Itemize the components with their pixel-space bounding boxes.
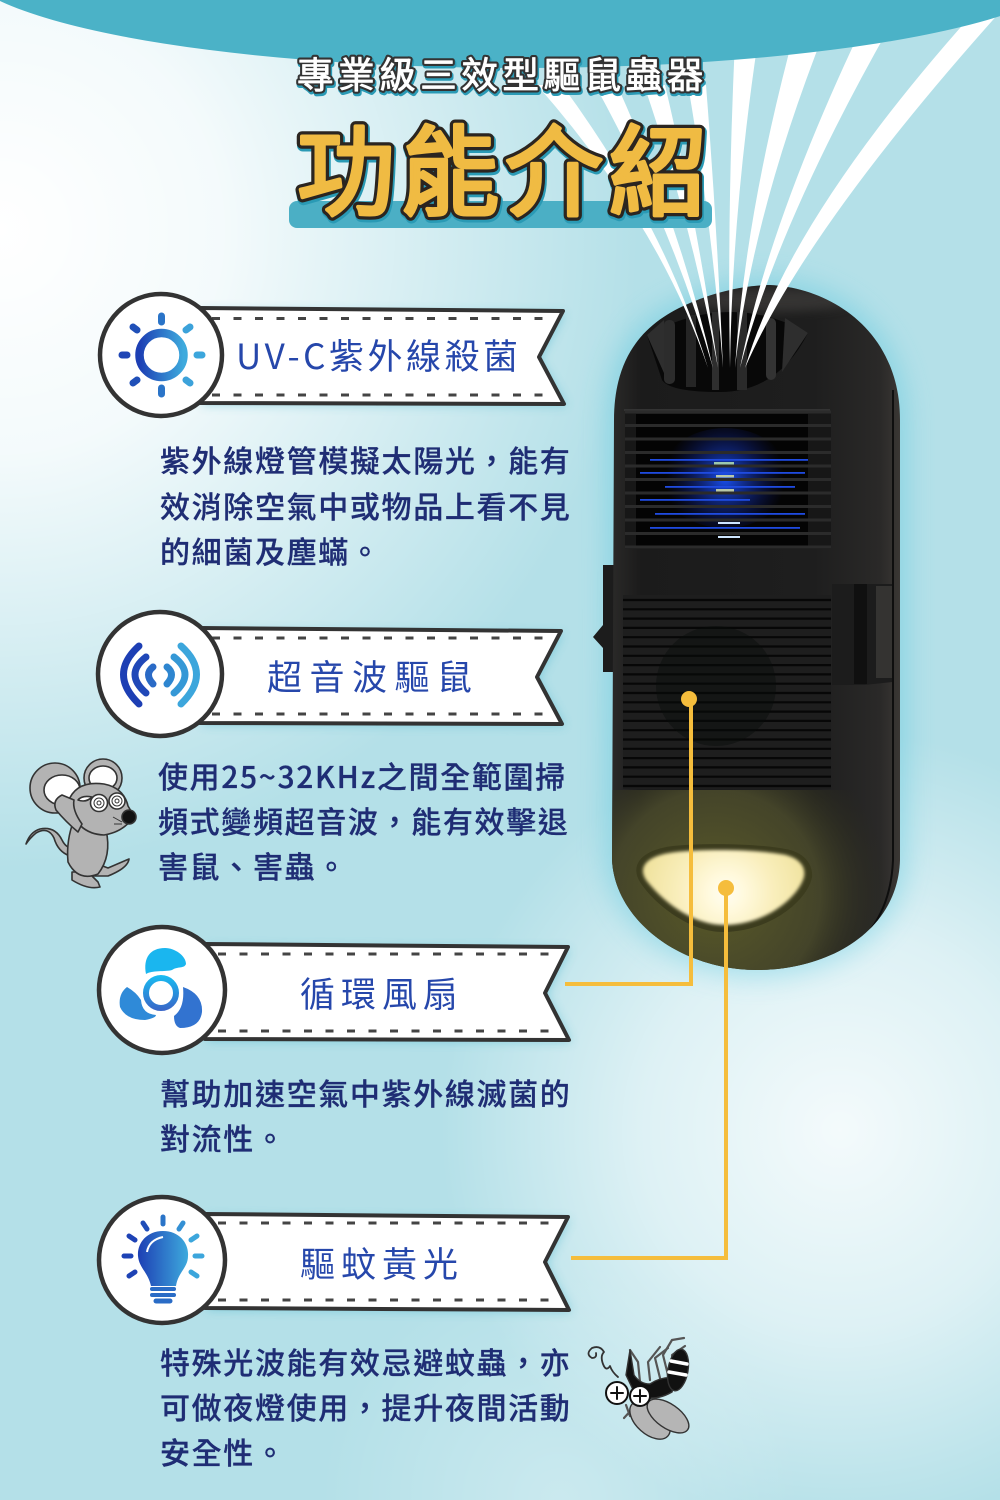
- legs: [624, 1338, 685, 1418]
- subtitle: 專業級三效型驅鼠蟲器: [297, 46, 708, 99]
- title underbar: [289, 201, 712, 228]
- subtitle: 專業級三效型驅鼠蟲器: [297, 46, 708, 99]
- upper grille: [625, 411, 831, 549]
- description: yellow light: 特殊光波能有效忌避蚊蟲，亦: [160, 1339, 571, 1383]
- top highlight: [685, 288, 855, 312]
- feature: yellow light: [99, 1197, 572, 1473]
- description: ultrasonic: 使用25~32KHz之間全範圍掃: [158, 753, 567, 797]
- eyes: [606, 1382, 628, 1404]
- tail: [26, 828, 72, 856]
- air streaks from device vent: [537, 0, 1000, 368]
- lower grille: [623, 595, 831, 789]
- arm: [55, 795, 82, 832]
- device body: [612, 285, 900, 970]
- legs: [72, 872, 100, 888]
- speaker circle: [656, 626, 776, 746]
- connector: fan to device: [565, 691, 697, 984]
- UV blue glow: [669, 428, 781, 527]
- heading: ultrasonic: 超音波驅鼠: [267, 650, 480, 701]
- title: 功能介紹: [297, 94, 713, 236]
- badge: sound wave icon: [98, 612, 222, 736]
- head: [68, 783, 134, 835]
- right seam: [869, 390, 894, 930]
- title: 功能介紹: [298, 96, 714, 238]
- illustration: dizzy mosquito: [588, 1338, 695, 1446]
- feature: UV-C: [100, 294, 571, 572]
- proboscis: [588, 1347, 618, 1377]
- ribbon 4: [205, 1214, 572, 1312]
- ribbon 3: [205, 944, 572, 1042]
- description: ultrasonic: 害鼠、害蟲。: [158, 843, 348, 887]
- ears: [30, 763, 80, 813]
- wings: [623, 1394, 677, 1446]
- top arc banner: [0, 0, 1000, 68]
- illustration: dizzy mouse: [26, 759, 136, 888]
- striped abdomen: [665, 1348, 691, 1392]
- vent lower band line: [624, 409, 830, 411]
- olive lamp tint: [612, 790, 868, 970]
- title: 功能介紹: [297, 94, 713, 236]
- torso: [68, 815, 108, 876]
- badge: fan icon: [99, 927, 225, 1053]
- top vent: [647, 312, 808, 392]
- body: [626, 1350, 676, 1398]
- heading: UV-C: UV-C紫外線殺菌: [236, 329, 521, 380]
- description: UV-C: 效消除空氣中或物品上看不見: [160, 483, 571, 527]
- heading: fan: 循環風扇: [300, 967, 464, 1018]
- device glow: [606, 279, 906, 976]
- badge: light bulb icon: [99, 1197, 225, 1323]
- heading: yellow light: 驅蚊黃光: [300, 1237, 464, 1288]
- badge: sun icon: [100, 294, 222, 416]
- nose: [122, 810, 136, 824]
- description: fan: 幫助加速空氣中紫外線滅菌的: [160, 1070, 571, 1114]
- description: UV-C: [160, 437, 571, 572]
- description: ultrasonic: [158, 753, 569, 887]
- spiral eyes: [90, 794, 108, 812]
- description: fan: [160, 1070, 571, 1159]
- connector: yellow light to device: [571, 880, 734, 1258]
- description: yellow light: 安全性。: [160, 1429, 287, 1473]
- left switch: [593, 565, 615, 672]
- product: ionic UV device: [593, 279, 906, 976]
- description: fan: 對流性。: [160, 1115, 287, 1159]
- ribbon 2: [200, 628, 565, 726]
- feature: ultrasonic: [98, 612, 569, 887]
- right clip: [832, 584, 892, 685]
- lamp window: [636, 844, 812, 932]
- sweat drop: [78, 796, 92, 801]
- ribbon 1: [200, 308, 567, 406]
- description: ultrasonic: 頻式變頻超音波，能有效擊退: [158, 798, 569, 842]
- description: UV-C: 的細菌及塵蟎。: [160, 528, 382, 572]
- description: UV-C: 紫外線燈管模擬太陽光，能有: [160, 437, 571, 481]
- feature: circulation fan: [99, 927, 572, 1159]
- description: yellow light: [160, 1339, 571, 1473]
- description: yellow light: 可做夜燈使用，提升夜間活動: [160, 1384, 571, 1428]
- subtitle: 專業級三效型驅鼠蟲器: [298, 48, 709, 101]
